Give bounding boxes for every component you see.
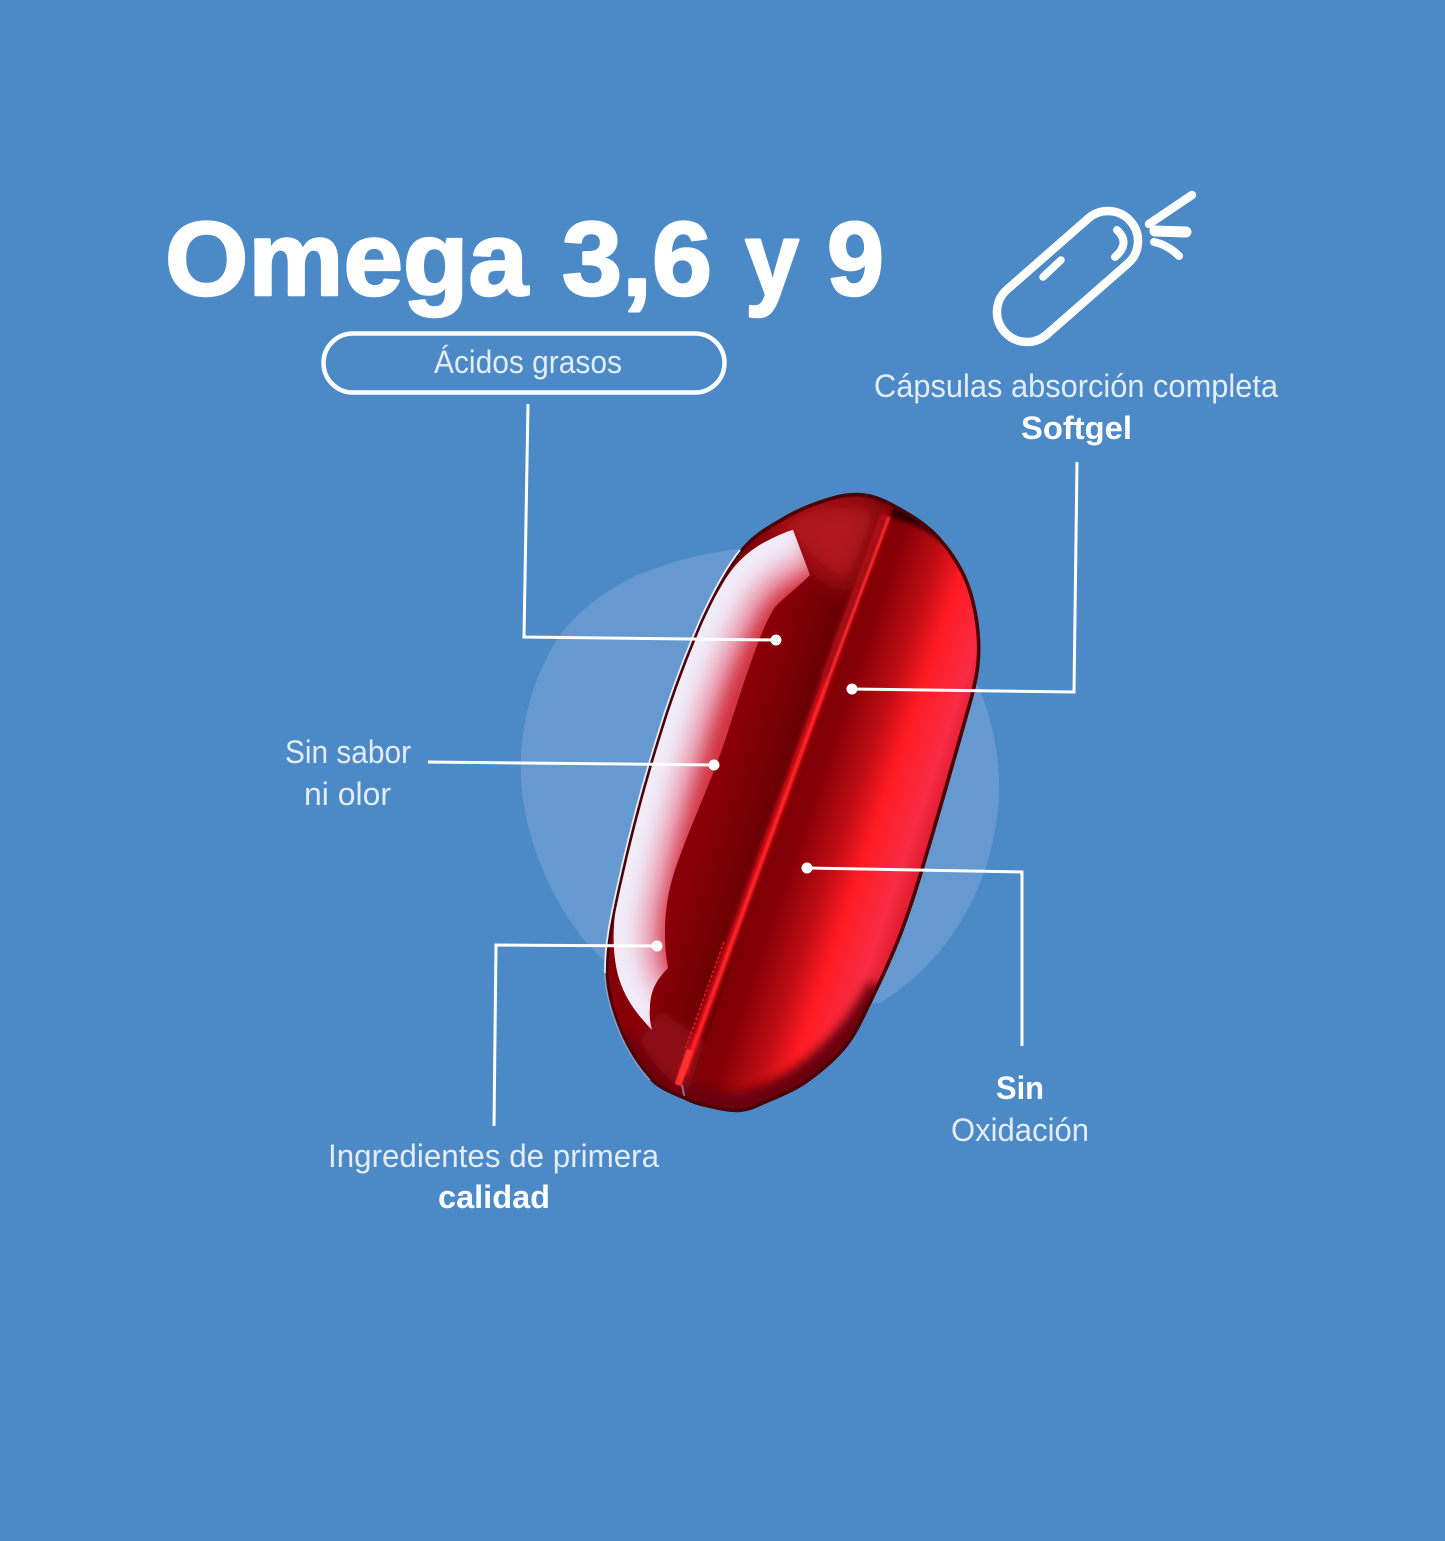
capsule rim bbox=[605, 493, 980, 1112]
callout line: Sin oxidación bbox=[802, 862, 1022, 1046]
title: y bbox=[745, 201, 799, 318]
capsule left edge glint bbox=[605, 550, 740, 1080]
label: Ingredientes de primera calidad: calidad bbox=[438, 1179, 550, 1215]
softgel caption bbox=[874, 368, 1278, 446]
label: Ingredientes de primera calidad bbox=[328, 1138, 659, 1215]
background blob bbox=[521, 548, 999, 1010]
label: Sin Oxidación: Sin bbox=[996, 1070, 1044, 1106]
pill label: Ácidos grasos: Ácidos grasos bbox=[434, 344, 622, 380]
label: Sin Oxidación: Oxidación bbox=[951, 1112, 1089, 1148]
left highlight bbox=[614, 530, 810, 1030]
title bbox=[165, 201, 884, 318]
pill label: Ácidos grasos bbox=[324, 334, 724, 392]
title: Omega bbox=[165, 201, 530, 318]
softgel caption: Softgel bbox=[1021, 410, 1132, 446]
title: 3,6 bbox=[562, 201, 712, 318]
label: Sin Oxidación bbox=[951, 1070, 1089, 1148]
red softgel capsule bbox=[605, 492, 980, 1112]
label: Ingredientes de primera calidad: Ingredientes de primera bbox=[328, 1138, 659, 1174]
callout line: Softgel bbox=[846, 462, 1077, 694]
label: Sin sabor ni olor: Sin sabor bbox=[285, 734, 411, 770]
label: Sin sabor ni olor bbox=[285, 734, 411, 812]
icon: softgel capsule bursting bbox=[985, 195, 1192, 354]
softgel caption: Cápsulas absorción completa bbox=[874, 368, 1278, 404]
label: Sin sabor ni olor: ni olor bbox=[304, 776, 391, 812]
callout line: Ácidos grasos bbox=[524, 404, 782, 646]
title: 9 bbox=[827, 201, 884, 318]
callout line: Sin sabor bbox=[428, 760, 720, 770]
callout line: Ingredientes bbox=[494, 940, 662, 1126]
